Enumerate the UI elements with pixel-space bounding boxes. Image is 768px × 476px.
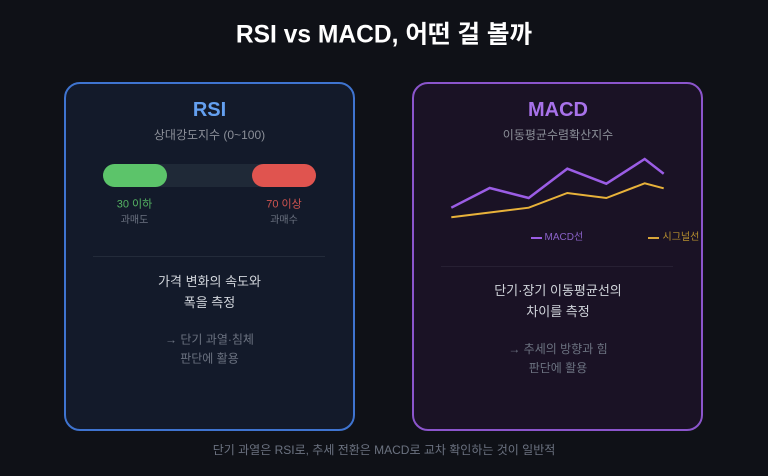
RSI usage note [165, 332, 254, 366]
legend swatch [648, 237, 659, 238]
overbought label: 과매수 [270, 214, 298, 226]
RSI description: 폭을 측정 [184, 294, 235, 310]
MACD description [494, 282, 622, 318]
gauge track [103, 164, 316, 187]
RSI gauge bar [103, 164, 316, 187]
signal line [451, 183, 664, 217]
legend label: 시그널선 [662, 232, 699, 243]
MACD heading: MACD [528, 99, 588, 121]
title: RSI vs MACD, 어떤 걸 볼까 [236, 21, 532, 48]
MACD subtitle: 이동평균수렴확산지수 [503, 128, 613, 142]
oversold zone [103, 164, 167, 187]
RSI description [158, 274, 261, 310]
oversold label: 과매도 [121, 214, 148, 226]
panel: RSI [64, 82, 355, 431]
MACD usage note: → 추세의 방향과 힘 [508, 342, 608, 356]
MACD usage note [508, 342, 608, 374]
RSI subtitle: 상대강도지수 (0~100) [154, 128, 265, 142]
MACD description: 단기·장기 이동평균선의 [494, 282, 622, 298]
RSI description: 가격 변화의 속도와 [158, 274, 261, 288]
oversold value: 30 이하 [117, 198, 152, 210]
overbought value: 70 이상 [266, 198, 302, 210]
panel: MACD [412, 82, 703, 431]
legend swatch [530, 237, 542, 238]
MACD usage note: 판단에 활용 [529, 360, 587, 374]
legend label: MACD선 [544, 232, 583, 243]
RSI usage note: 판단에 활용 [180, 352, 239, 366]
RSI heading: RSI [193, 99, 226, 121]
MACD line chart [450, 158, 664, 218]
overbought zone [252, 164, 316, 187]
MACD description: 차이를 측정 [526, 304, 590, 318]
MACD line [451, 159, 664, 208]
RSI usage note: → 단기 과열·침체 [165, 332, 254, 346]
footer note: 단기 과열은 RSI로, 추세 전환은 MACD로 교차 확인하는 것이 일반적 [213, 443, 555, 457]
